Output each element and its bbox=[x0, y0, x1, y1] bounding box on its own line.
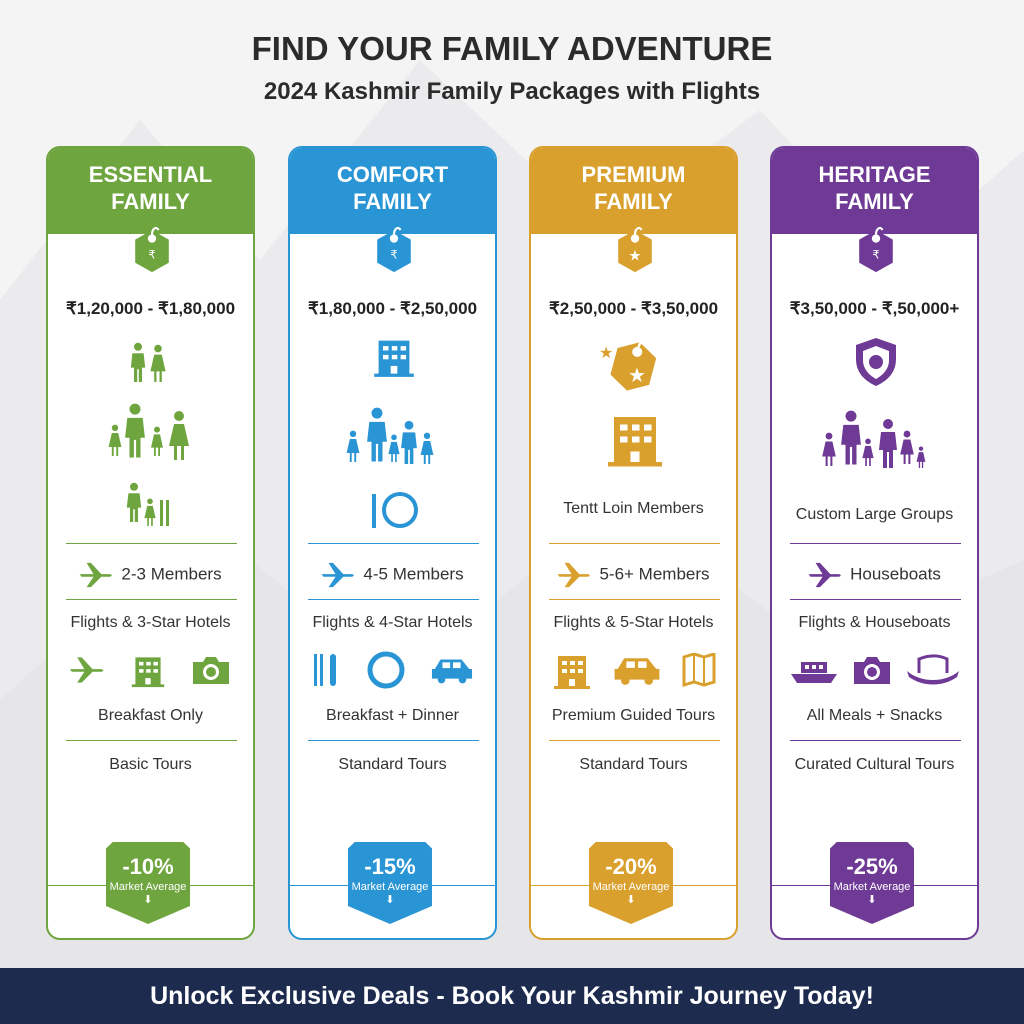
icon: price tag bbox=[377, 226, 411, 272]
badge: Market Average bbox=[834, 881, 910, 893]
hotels: Flights & 5-Star Hotels bbox=[553, 614, 714, 631]
heading bbox=[772, 148, 977, 234]
meals: All Meals + Snacks bbox=[807, 707, 942, 724]
title: FIND YOUR FAMILY ADVENTURE bbox=[252, 30, 772, 67]
members: Houseboats bbox=[850, 564, 941, 583]
badge: -15% bbox=[364, 854, 416, 879]
heading bbox=[290, 148, 495, 234]
heading: FAMILY bbox=[353, 189, 432, 214]
footer banner bbox=[0, 968, 1024, 1024]
tours: Standard Tours bbox=[338, 756, 447, 773]
icons row bbox=[554, 653, 716, 689]
members: 5-6+ Members bbox=[599, 564, 710, 583]
members bbox=[808, 562, 941, 588]
footer banner: Unlock Exclusive Deals - Book Your Kashmir Journey Today! bbox=[150, 982, 874, 1010]
price: ₹1,80,000 - ₹2,50,000 bbox=[308, 299, 477, 318]
members: 4-5 Members bbox=[363, 564, 464, 583]
badge: -20% bbox=[605, 854, 657, 879]
tours: Standard Tours bbox=[579, 756, 688, 773]
badge bbox=[106, 842, 190, 924]
badge: ⬇ bbox=[143, 894, 153, 906]
badge: Market Average bbox=[352, 881, 428, 893]
badge: -25% bbox=[846, 854, 898, 879]
badge: ⬇ bbox=[626, 894, 636, 906]
tours: Basic Tours bbox=[109, 756, 192, 773]
panel: heritage family bbox=[770, 146, 979, 940]
icon: price tag bbox=[135, 226, 169, 272]
icon: price tag star bbox=[618, 226, 652, 272]
members label: Custom Large Groups bbox=[796, 506, 953, 523]
heading: COMFORT bbox=[337, 162, 448, 187]
icon: tag and hotel bbox=[599, 342, 662, 466]
panel: premium family bbox=[529, 146, 738, 940]
icon: hotel family plate bbox=[346, 340, 434, 528]
badge: -10% bbox=[122, 854, 174, 879]
badge: ⬇ bbox=[867, 894, 877, 906]
members bbox=[558, 562, 710, 588]
heading: FAMILY bbox=[835, 189, 914, 214]
icon: price tag star: ★ bbox=[628, 248, 642, 265]
tours: Curated Cultural Tours bbox=[795, 756, 954, 773]
icon: price tag: ₹ bbox=[148, 250, 156, 262]
badge: ⬇ bbox=[385, 894, 395, 906]
heading bbox=[48, 148, 253, 234]
icon: shield and family bbox=[822, 338, 926, 468]
heading: HERITAGE bbox=[818, 162, 931, 187]
icons row bbox=[70, 657, 229, 688]
heading: ESSENTIAL bbox=[89, 162, 212, 187]
icon: family bbox=[108, 342, 189, 526]
heading: FAMILY bbox=[111, 189, 190, 214]
icon: tag and hotel: ★ bbox=[628, 363, 646, 387]
price: ₹1,20,000 - ₹1,80,000 bbox=[66, 299, 235, 318]
heading bbox=[531, 148, 736, 234]
icon: price tag: ₹ bbox=[872, 250, 880, 262]
badge: Market Average bbox=[593, 881, 669, 893]
badge bbox=[589, 842, 673, 924]
panel: comfort family bbox=[288, 146, 497, 940]
meals: Breakfast + Dinner bbox=[326, 707, 459, 724]
heading: FAMILY bbox=[594, 189, 673, 214]
badge bbox=[830, 842, 914, 924]
icon: price tag: ₹ bbox=[390, 250, 398, 262]
icon: tag and hotel: ★ bbox=[599, 343, 613, 362]
price: ₹3,50,000 - ₹,50,000+ bbox=[790, 299, 959, 318]
members label: Tentt Loin Members bbox=[563, 500, 704, 517]
panel: essential family bbox=[46, 146, 255, 940]
hotels: Flights & Houseboats bbox=[798, 614, 951, 631]
hotels: Flights & 4-Star Hotels bbox=[312, 614, 473, 631]
badge: Market Average bbox=[110, 881, 186, 893]
hotels: Flights & 3-Star Hotels bbox=[70, 614, 231, 631]
price: ₹2,50,000 - ₹3,50,000 bbox=[549, 299, 718, 318]
members: 2-3 Members bbox=[121, 564, 222, 583]
icons row bbox=[314, 652, 472, 688]
icons row bbox=[791, 654, 959, 684]
meals: Premium Guided Tours bbox=[552, 707, 715, 724]
icon: price tag bbox=[859, 226, 893, 272]
members bbox=[80, 562, 222, 588]
subtitle: 2024 Kashmir Family Packages with Flights bbox=[264, 78, 760, 105]
members bbox=[322, 562, 464, 588]
heading: PREMIUM bbox=[582, 162, 685, 187]
meals: Breakfast Only bbox=[98, 707, 203, 724]
badge bbox=[348, 842, 432, 924]
